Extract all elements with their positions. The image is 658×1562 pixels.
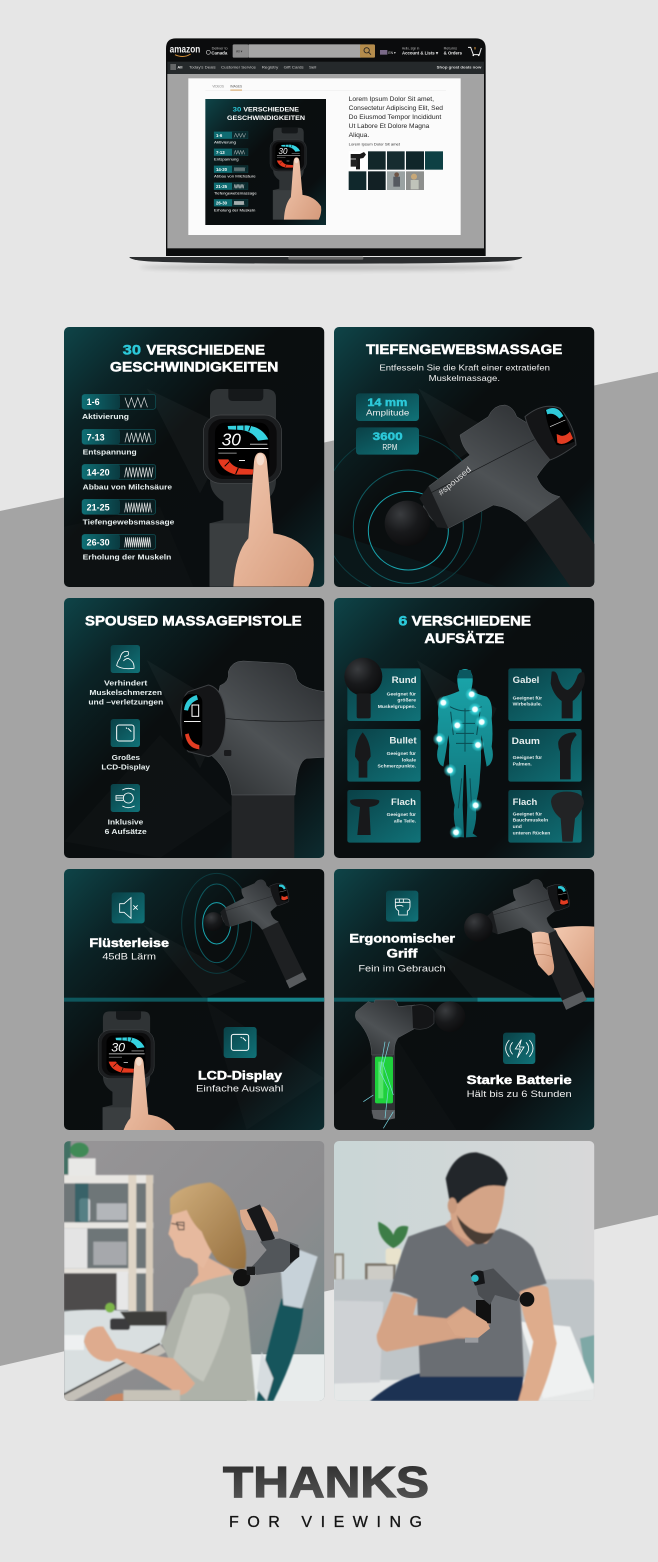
mini product image: Entspannung [214, 158, 239, 162]
feature: Starke Batterie: Hält bis zu 6 Stunden [467, 1089, 572, 1099]
feature: Flüsterleise: 45dB Lärm [102, 952, 156, 962]
benefit: display [102, 754, 150, 771]
benefit: attachments [104, 819, 146, 834]
benefit: attachments: 6 Aufsätze [105, 827, 147, 836]
woman [84, 1182, 256, 1401]
speed 14-20 [82, 464, 172, 491]
amazon header: Today's Deals [189, 65, 216, 70]
laptop mockup with amazon page [129, 38, 522, 271]
mini product image: 1-6 [216, 133, 223, 138]
amazon header: Customer Service [221, 65, 257, 70]
card: Gabel: Geeignet für [513, 695, 542, 701]
card: Daum: Geeignet für [513, 755, 542, 761]
office chair [257, 1250, 318, 1401]
listing text: Consectetur Adipiscing Elit, Sed [349, 105, 443, 112]
amazon header: Deliver to [212, 46, 228, 50]
subtitle: Muskelmassage. [429, 373, 500, 383]
icon: attachments [111, 784, 140, 812]
feature: Ergonomischer Griff: Ergonomischer [349, 931, 455, 945]
feature: Starke Batterie: Starke Batterie [467, 1073, 572, 1087]
speed 1-6: Aktivierung [82, 412, 129, 421]
speed 1-6: 1-6 [87, 397, 100, 407]
subtitle: Entfesseln Sie die Kraft einer extratiefen [379, 363, 550, 373]
feature: Ergonomischer Griff: Fein im Gebrauch [358, 964, 446, 974]
amazon header: EN ▾ [388, 50, 396, 55]
listing text: Aliqua. [349, 132, 369, 139]
icon: display [224, 1027, 257, 1058]
amazon header: Gift Cards [284, 65, 304, 70]
card: Daum: Palmen. [513, 761, 532, 767]
amazon header: 0 [474, 46, 476, 50]
stat: 3600 rpm: 3600 [373, 431, 403, 443]
gun front view with finger: 30 [111, 1041, 125, 1055]
panel: Tiefengewebsmassage [334, 327, 594, 587]
heading: 6 [398, 614, 408, 629]
card: Flach [347, 790, 421, 843]
feature: LCD-Display: Einfache Auswahl [196, 1084, 283, 1094]
card: Flach: Geeignet für [387, 812, 416, 818]
benefit: muscle pain: Verhindert [104, 679, 148, 688]
stat: 14 mm amplitude: 14 mm [367, 397, 407, 409]
amazon header: Sell [309, 65, 316, 70]
panel: Spoused Massagepistole [64, 598, 325, 858]
card: Rund: Geeignet für [387, 692, 416, 698]
laptop base [129, 257, 522, 264]
massage gun: #spoused [436, 465, 473, 498]
card: Flach (Bauch): Geeignet für [513, 812, 542, 818]
massage gun and hand [233, 1204, 299, 1286]
speed 26-30: 26-30 [87, 537, 110, 547]
mini product image: Tiefengewebsmassage [214, 192, 257, 196]
amazon header: Returns [444, 46, 457, 50]
listing text [349, 96, 443, 147]
heading [110, 344, 278, 372]
massage gun front view with finger [203, 389, 314, 587]
panel: Ergonomischer Griff / Starke Batterie [334, 867, 609, 1130]
page tabs: VIDEOS [212, 85, 225, 89]
icon: muscle [111, 645, 140, 673]
card: Bullet: Geeignet für [387, 751, 416, 757]
massage gun [384, 404, 594, 587]
card: Rund: größere [397, 698, 416, 704]
feature: Flüsterleise [90, 938, 169, 960]
thumbnails [349, 151, 443, 190]
heading [398, 616, 531, 644]
amazon header: Account & Lists ▾ [402, 51, 439, 56]
man [370, 1152, 557, 1401]
mini product image: Abbau von Milchsäure [214, 175, 256, 179]
card: Flach (Bauch): unteren Rücken [513, 830, 550, 836]
page tabs: IMAGES [230, 85, 243, 89]
massage gun [447, 1268, 534, 1343]
card: Daum [508, 729, 582, 782]
card: Daum: Daum [512, 736, 540, 746]
listing text: Ut Labore Et Dolore Magna [349, 123, 430, 130]
heading: GESCHWINDIGKEITEN [110, 360, 278, 375]
mini product image: 30 [279, 147, 288, 156]
card: Flach (Bauch): und [513, 824, 522, 830]
mini product image: 7-13 [216, 150, 225, 155]
speed 26-30 [82, 534, 172, 561]
feature: Flüsterleise: Flüsterleise [89, 936, 169, 950]
mini product image: 14-20 [216, 167, 228, 172]
massage gun [181, 661, 325, 858]
speed 7-13: 7-13 [87, 432, 105, 442]
panel: 6 verschiedene Aufsätze [334, 598, 594, 858]
benefit: muscle pain: und –verletzungen [88, 697, 164, 706]
card: Gabel [508, 668, 585, 721]
amazon header: All ▾ [236, 49, 243, 53]
card: Rund: Rund [392, 675, 417, 685]
stat: 14 mm amplitude: Amplitude [366, 407, 410, 417]
divider [334, 998, 594, 1002]
mini product image: Aktivierung [214, 141, 236, 145]
benefit: display: Großes [112, 753, 140, 762]
mini product image: 26-30 [216, 201, 228, 206]
subtitle [380, 364, 550, 382]
panel: woman with massage gun at desk [64, 1141, 324, 1401]
card: Rund: Muskelgruppen. [378, 704, 417, 710]
massage gun front view with finger: 30 [222, 429, 241, 449]
card: Rund [344, 658, 421, 721]
vibration rings [334, 434, 482, 587]
divider [64, 998, 324, 1002]
feature: LCD-Display: LCD-Display [198, 1068, 282, 1082]
card: Bullet: lokale [402, 757, 416, 763]
feature: LCD-Display [196, 1068, 283, 1094]
icon: fist [386, 891, 418, 922]
card: Bullet: Schmerzpunkte. [377, 764, 417, 770]
feature: Ergonomischer Griff [349, 931, 455, 974]
room background [334, 1222, 594, 1401]
floor [247, 1354, 324, 1401]
massage gun in hand [454, 867, 609, 1014]
thanks heading: THANKS [223, 1458, 429, 1507]
card: Gabel: Gabel [513, 675, 539, 685]
listing text: Lorem Ipsum Dolor Sit amet, [349, 96, 434, 103]
rings and massage gun [181, 873, 307, 988]
card: Flach (Bauch): Flach [513, 797, 538, 807]
speed 7-13 [82, 429, 156, 456]
stat: 3600 rpm [356, 427, 419, 455]
icon: display [111, 719, 140, 747]
card: Flach (Bauch) [508, 790, 584, 843]
card: Gabel: Wirbelsäule. [513, 701, 543, 707]
page tabs [205, 85, 446, 91]
listing text: Lorem Ipsum Dolor Sit amet [349, 143, 400, 147]
mini product image: GESCHWINDIGKEITEN [227, 115, 305, 122]
feature: Ergonomischer Griff: Griff [387, 947, 418, 961]
glass desk [64, 1303, 167, 1401]
speed 14-20: Abbau von Milchsäure [83, 482, 172, 491]
benefit: muscle pain: Muskelschmerzen [89, 688, 163, 697]
card: Flach (Bauch): Bauchmuskeln [513, 818, 548, 824]
panel: 30 verschiedene Geschwindigkeiten [64, 327, 324, 587]
amazon header: Canada [211, 51, 228, 56]
speed 7-13: Entspannung [83, 447, 137, 456]
card: Flach: Flach [391, 797, 416, 807]
mini product image [205, 99, 326, 225]
mini product image: Erholung der Muskeln [214, 209, 255, 213]
icon: muted speaker [112, 892, 145, 923]
speed 21-25: 21-25 [87, 502, 110, 512]
speed 21-25 [82, 499, 174, 526]
listing text: Do Eiusmod Tempor Incididunt [349, 114, 441, 121]
mini product image: VERSCHIEDENE [243, 107, 300, 114]
gun front view with finger [98, 1011, 176, 1130]
massage gun with battery [355, 1000, 465, 1128]
amazon header: Shop great deals now [437, 65, 482, 70]
heading: VERSCHIEDENE [146, 342, 265, 357]
stat: 3600 rpm: RPM [382, 442, 397, 452]
mini product image: 21-25 [216, 184, 228, 189]
panel: man with massage gun on sofa [334, 1141, 594, 1401]
amazon header: All [177, 65, 182, 70]
heading: TIEFENGEWEBSMASSAGE [366, 342, 562, 357]
stat: 14 mm amplitude [356, 393, 419, 421]
amazon header: & Orders [444, 51, 463, 56]
mini product image: 30 [233, 107, 242, 114]
amazon header: Registry [262, 65, 278, 70]
speed 14-20: 14-20 [87, 467, 110, 477]
card: Flach: alle Teile. [394, 818, 417, 824]
office shelf [64, 1141, 153, 1312]
speed 1-6 [82, 394, 156, 421]
benefit: muscle pain [88, 679, 164, 706]
benefit: display: LCD-Display [101, 762, 151, 771]
for viewing subtitle: FOR VIEWING [229, 1514, 422, 1531]
speed 26-30: Erholung der Muskeln [83, 552, 172, 561]
human body with target points [433, 669, 493, 839]
card: Bullet [347, 729, 421, 782]
amazon header: amazon [170, 45, 200, 56]
benefit: attachments: Inklusive [108, 818, 143, 827]
heading: SPOUSED MASSAGEPISTOLE [85, 614, 302, 629]
card: Bullet: Bullet [389, 736, 417, 746]
heading: VERSCHIEDENE [412, 614, 531, 629]
feature: Starke Batterie [467, 1073, 572, 1099]
amazon header [170, 44, 482, 70]
speed 21-25: Tiefengewebsmassage [83, 517, 174, 526]
amazon header: Hello, sign in [402, 46, 419, 50]
icon: battery charge [503, 1033, 535, 1064]
heading: AUFSÄTZE [424, 631, 504, 646]
heading: 30 [123, 342, 141, 357]
panel: Flüsterleise / LCD-Display [64, 869, 324, 1153]
